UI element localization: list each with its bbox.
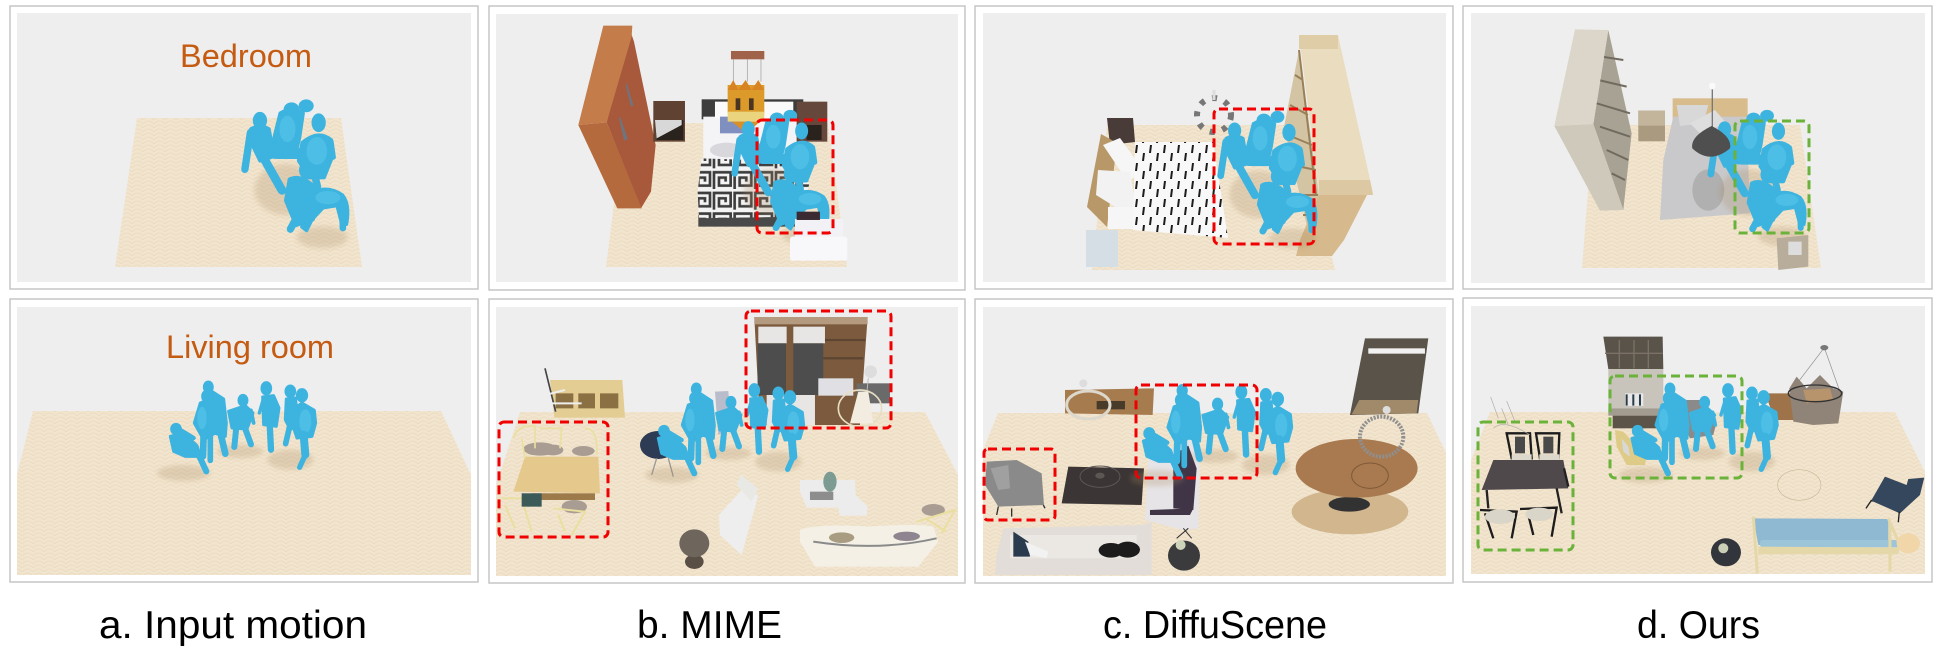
panel: b. MIME, living room (489, 299, 965, 583)
callout: implausible cabinet (746, 311, 891, 428)
carpet (115, 118, 362, 267)
carpet (17, 411, 471, 575)
carpet (1582, 125, 1821, 268)
panel: d. Ours, bedroom (1463, 6, 1932, 289)
human motion figures (1221, 112, 1316, 249)
label: Living room: Living room (166, 329, 334, 365)
human motion figures (157, 382, 316, 481)
panel: a. input motion, living room (10, 299, 478, 582)
furniture: bedroom scene (578, 26, 847, 261)
callout: implausible region (757, 120, 833, 233)
panel: c. DiffuScene, living room (975, 299, 1453, 583)
panel: b. MIME, bedroom (489, 6, 965, 290)
callout: implausible dining set (499, 422, 608, 537)
furniture: bedroom scene (1554, 29, 1808, 270)
panel: c. DiffuScene, bedroom (975, 6, 1453, 289)
human motion figures (245, 101, 348, 248)
callout: implausible region (1214, 109, 1314, 244)
callout: plausible dining set (1478, 422, 1573, 550)
callout: plausible seating (1610, 376, 1742, 478)
carpet (1471, 412, 1925, 574)
furniture: living room scene (985, 338, 1428, 575)
caption: a. Input motion: a. Input motion (99, 604, 367, 647)
carpet (496, 412, 958, 576)
carpet (983, 413, 1446, 576)
callout: implausible chair (984, 449, 1055, 520)
callout: implausible sofa overlap (1136, 385, 1257, 478)
label: Bedroom: Bedroom (180, 38, 312, 74)
callout: plausible region (1735, 121, 1809, 233)
furniture: living room scene (1480, 337, 1924, 573)
caption: c. DiffuScene: c. DiffuScene (1103, 604, 1327, 647)
furniture: living room scene (502, 317, 955, 569)
panel: a. input motion, bedroom (10, 6, 478, 289)
carpet (606, 123, 847, 267)
caption: b. MIME: b. MIME (637, 604, 782, 647)
caption: d. Ours: d. Ours (1637, 604, 1760, 647)
panel: d. Ours, living room (1463, 298, 1932, 582)
carpet (1092, 125, 1335, 270)
furniture: bedroom scene (1086, 35, 1373, 267)
